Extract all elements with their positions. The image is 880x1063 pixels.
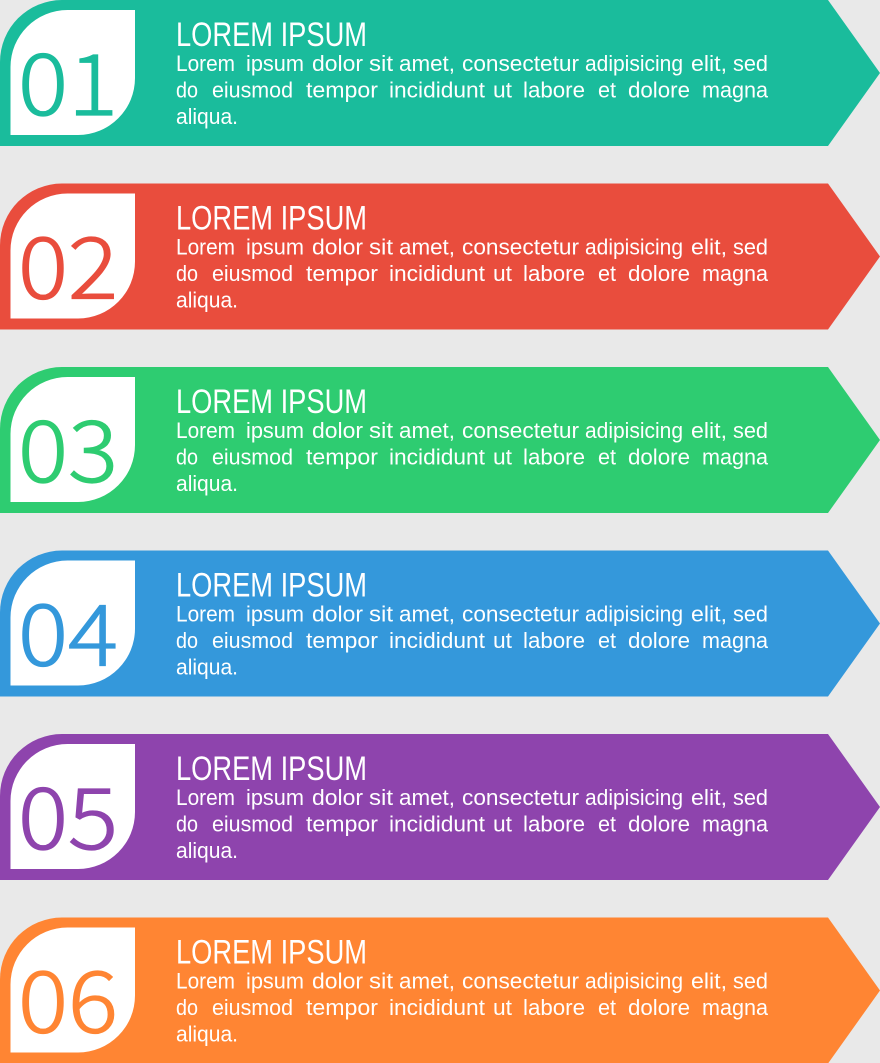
body text 03: consectetur (462, 418, 580, 443)
body text 02: elit, (691, 234, 727, 260)
body text 06: labore (523, 995, 585, 1020)
body text 01: magna (702, 78, 768, 102)
panel: banner 04 (0, 550, 880, 696)
body text 05: aliqua. (176, 838, 238, 863)
arrow background 01 (0, 0, 880, 146)
body text 05: elit, (691, 785, 727, 810)
body text 06: consectetur (462, 968, 580, 994)
body text 05: labore (523, 812, 585, 836)
body text 03: ipsum (246, 418, 304, 443)
body text 05: do (176, 812, 198, 836)
body text 05: Lorem (176, 785, 235, 810)
leaf badge 05 (10, 744, 135, 869)
body text 04: aliqua. (176, 654, 238, 680)
heading 06: LOREM IPSUM (176, 934, 367, 972)
body text 06: tempor (306, 995, 379, 1020)
number 04: 04 (18, 568, 118, 690)
body text 01: aliqua. (176, 104, 238, 129)
arrow background 06 (0, 918, 880, 1063)
body text 03: ut (493, 444, 513, 470)
body text 05: amet, (399, 785, 455, 810)
body text 05: magna (702, 812, 768, 836)
body text 05 (176, 785, 768, 863)
leaf badge 03 (10, 377, 135, 502)
body text 02: incididunt (389, 261, 486, 286)
body text 06: eiusmod (212, 995, 293, 1020)
body text 04: Lorem (176, 602, 235, 626)
body text 02: et (598, 261, 617, 286)
body text 04: amet, (399, 602, 455, 626)
body text 01: ipsum (246, 51, 304, 76)
body text 06: aliqua. (176, 1022, 238, 1046)
heading 02: LOREM IPSUM (176, 200, 367, 238)
body text 03 (176, 418, 768, 496)
body text 03: et (598, 444, 617, 470)
body text 06: sed (733, 968, 768, 994)
body text 04 (176, 602, 768, 680)
leaf badge 01 (10, 10, 135, 135)
body text 01 (176, 51, 768, 129)
arrow background 03 (0, 367, 880, 513)
body text 04: adipisicing (585, 602, 683, 626)
body text 01: eiusmod (212, 78, 293, 102)
body text 04: incididunt (389, 628, 486, 653)
body text 05: eiusmod (212, 812, 293, 836)
body text 01: ut (493, 78, 513, 102)
panel: banner 02 (0, 184, 880, 330)
body text 02: aliqua. (176, 288, 238, 312)
body text 03: Lorem (176, 418, 235, 443)
body text 03: amet, (399, 418, 455, 443)
number 06: 06 (18, 934, 118, 1058)
body text 06 (176, 968, 768, 1046)
body text 02: magna (702, 261, 768, 286)
body text 04: dolore (628, 628, 690, 653)
body text 06: Lorem (176, 968, 235, 994)
body text 06: dolor (312, 968, 364, 994)
arrow background 02 (0, 184, 880, 330)
body text 03: dolor (312, 418, 364, 443)
leaf badge 06 (10, 928, 135, 1052)
body text 06: ipsum (246, 968, 304, 994)
body text 06: elit, (691, 968, 727, 994)
body text 03: sed (733, 418, 768, 443)
panel: banner 03 (0, 367, 880, 513)
body text 06: magna (702, 995, 768, 1020)
body text 04: elit, (691, 602, 727, 626)
body text 01: dolor (312, 51, 364, 76)
body text 06: sit (369, 968, 394, 994)
body text 02: labore (523, 261, 585, 286)
body text 06: dolore (628, 995, 690, 1020)
body text 04: tempor (306, 628, 379, 653)
body text 04: sed (733, 602, 768, 626)
body text 03: do (176, 444, 198, 470)
body text 01: tempor (306, 78, 379, 102)
body text 05: incididunt (389, 812, 486, 836)
body text 06: incididunt (389, 995, 486, 1020)
arrow background 04 (0, 550, 880, 696)
body text 05: tempor (306, 812, 379, 836)
panel: banner 06 (0, 918, 880, 1063)
body text 05: consectetur (462, 785, 580, 810)
body text 04: sit (369, 602, 394, 626)
body text 06: et (598, 995, 617, 1020)
body text 05: dolor (312, 785, 364, 810)
panel: banner 05 (0, 734, 880, 880)
number 05: 05 (18, 751, 118, 874)
heading 04: LOREM IPSUM (176, 566, 367, 604)
body text 04: labore (523, 628, 585, 653)
body text 02: ut (493, 261, 513, 286)
body text 04: do (176, 628, 198, 653)
body text 01: amet, (399, 51, 455, 76)
body text 02: dolore (628, 261, 690, 286)
body text 05: sit (369, 785, 394, 810)
body text 03: incididunt (389, 444, 486, 470)
body text 01: incididunt (389, 78, 486, 102)
body text 03: eiusmod (212, 444, 293, 470)
body text 05: et (598, 812, 617, 836)
body text 02: ipsum (246, 234, 304, 260)
heading 01: LOREM IPSUM (176, 16, 367, 54)
body text 02: tempor (306, 261, 379, 286)
body text 06: ut (493, 995, 513, 1020)
body text 05: adipisicing (585, 785, 683, 810)
body text 05: ut (493, 812, 513, 836)
body text 02 (176, 234, 768, 312)
body text 02: adipisicing (585, 234, 683, 260)
body text 02: do (176, 261, 198, 286)
body text 06: do (176, 995, 198, 1020)
body text 03: tempor (306, 444, 379, 470)
body text 03: dolore (628, 444, 690, 470)
body text 01: sit (369, 51, 394, 76)
body text 02: amet, (399, 234, 455, 260)
body text 03: adipisicing (585, 418, 683, 443)
body text 04: ut (493, 628, 513, 653)
body text 01: elit, (691, 51, 727, 76)
body text 04: consectetur (462, 602, 580, 626)
body text 03: magna (702, 444, 768, 470)
body text 01: sed (733, 51, 768, 76)
body text 03: sit (369, 418, 394, 443)
body text 04: ipsum (246, 602, 304, 626)
heading 03: LOREM IPSUM (176, 383, 367, 421)
body text 05: ipsum (246, 785, 304, 810)
body text 01: labore (523, 78, 585, 102)
body text 01: do (176, 78, 198, 102)
arrow background 05 (0, 734, 880, 880)
body text 04: magna (702, 628, 768, 653)
body text 06: adipisicing (585, 968, 683, 994)
body text 01: Lorem (176, 51, 235, 76)
body text 01: adipisicing (585, 51, 683, 76)
number 01: 01 (18, 17, 118, 140)
body text 04: eiusmod (212, 628, 293, 653)
body text 03: labore (523, 444, 585, 470)
body text 01: consectetur (462, 51, 580, 76)
body text 01: dolore (628, 78, 690, 102)
panel: banner 01 (0, 0, 880, 146)
heading 05: LOREM IPSUM (176, 750, 367, 788)
leaf badge 04 (10, 560, 135, 686)
body text 03: aliqua. (176, 471, 238, 496)
body text 02: consectetur (462, 234, 580, 260)
body text 06: amet, (399, 968, 455, 994)
body text 04: et (598, 628, 617, 653)
body text 01: et (598, 78, 617, 102)
number 03: 03 (18, 384, 118, 507)
leaf badge 02 (10, 194, 135, 318)
body text 02: sed (733, 234, 768, 260)
body text 05: sed (733, 785, 768, 810)
body text 02: dolor (312, 234, 364, 260)
body text 03: elit, (691, 418, 727, 443)
body text 04: dolor (312, 602, 364, 626)
body text 02: sit (369, 234, 394, 260)
body text 02: Lorem (176, 234, 235, 260)
body text 02: eiusmod (212, 261, 293, 286)
number 02: 02 (18, 200, 118, 324)
body text 05: dolore (628, 812, 690, 836)
